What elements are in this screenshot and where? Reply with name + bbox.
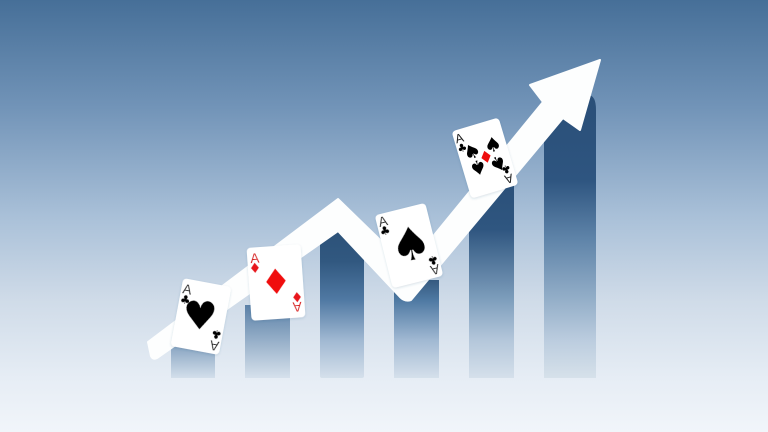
card: ace of spades: A: [377, 213, 389, 230]
rising zigzag arrow: [148, 60, 600, 359]
card: ace of hearts: [171, 278, 231, 355]
card: ace of spades: ♣: [426, 252, 440, 268]
card: ace of diamonds: ♦: [248, 260, 262, 277]
card: ace of hearts: ♥: [182, 294, 218, 340]
card: ace of spades: ♠: [386, 214, 435, 274]
card: ace of hearts: A: [209, 337, 220, 354]
card: ace of spades: [375, 203, 443, 288]
card: ace of diamonds: ♦: [259, 262, 293, 304]
card: ace of diamonds: A: [250, 251, 260, 266]
card: ace of spades: ♣: [378, 223, 392, 239]
card: multiple spades with red diamond: A: [453, 130, 466, 146]
card: multiple spades with red diamond: ♣: [499, 161, 513, 177]
card: ace of hearts: ♣: [179, 292, 192, 308]
card: multiple spades with red diamond: ♠: [482, 131, 504, 158]
card: multiple spades with red diamond: ♠: [466, 154, 490, 181]
card: multiple spades with red diamond: A: [502, 171, 515, 187]
card: ace of diamonds: ♦: [290, 288, 304, 305]
card: multiple spades with red diamond: [452, 117, 518, 199]
card: multiple spades with red diamond: ♣: [456, 140, 469, 156]
card: multiple spades with red diamond: ♠: [458, 137, 486, 166]
card: multiple spades with red diamond: ♠: [484, 149, 512, 178]
card: ace of hearts: ♣: [210, 326, 223, 342]
card: ace of spades: A: [429, 261, 441, 278]
bar chart: [171, 95, 596, 378]
card: multiple spades with red diamond: ♦: [476, 146, 496, 170]
card: ace of diamonds: A: [292, 299, 302, 314]
card: ace of hearts: A: [181, 281, 193, 298]
card: ace of diamonds: [247, 244, 305, 321]
